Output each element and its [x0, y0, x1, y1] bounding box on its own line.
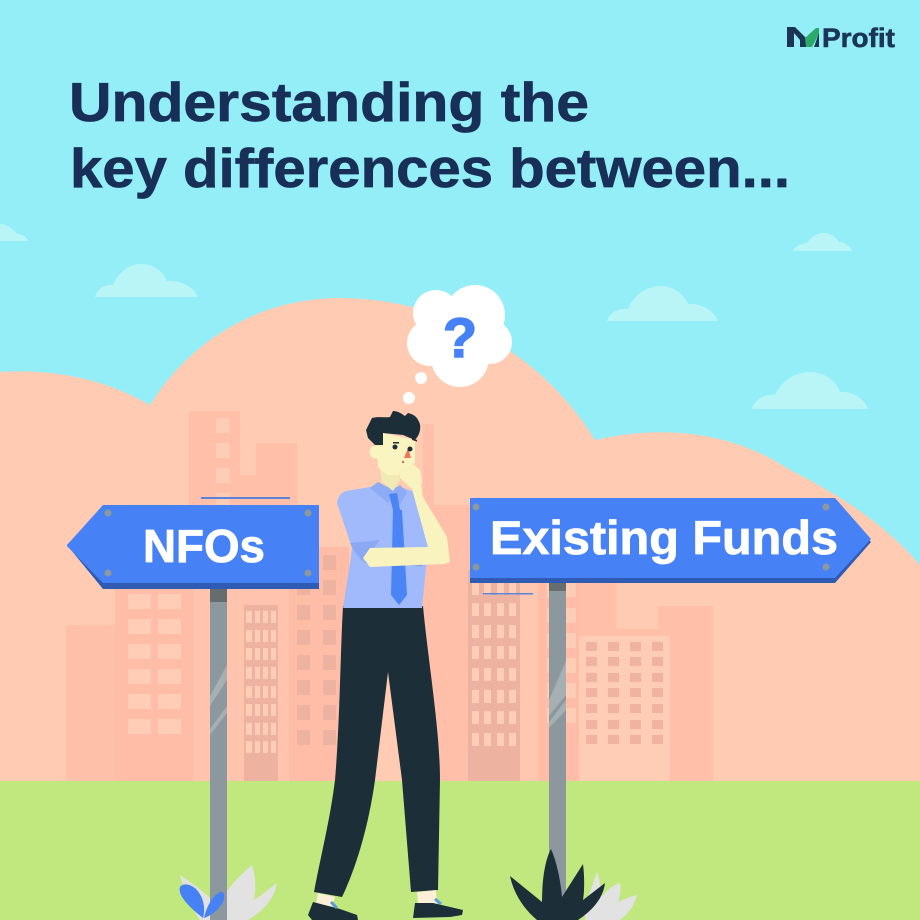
windowed building left: [115, 585, 193, 781]
question mark: ?: [443, 306, 477, 369]
sleeve shadow: [365, 558, 422, 566]
logo: MProfit: [787, 23, 895, 53]
ear: [370, 446, 382, 458]
left signpost: [210, 589, 227, 920]
face: [377, 433, 415, 475]
building windows behind right post: [547, 583, 576, 723]
clouds: [0, 224, 868, 409]
dark narrow building right: [468, 570, 520, 781]
plant: blue leaves: [180, 884, 224, 918]
tie: [389, 493, 407, 605]
plant: grey right: [585, 872, 637, 920]
low building left: [66, 625, 115, 781]
thought bubble: [403, 285, 512, 404]
label: Existing Funds: Existing Funds: [490, 511, 838, 564]
sign: NFOs: [67, 505, 319, 589]
collar: [370, 482, 407, 505]
dark narrow building left: [244, 605, 278, 781]
accent line left: [201, 497, 290, 499]
shirt: [337, 487, 428, 608]
building right of the man: [423, 424, 470, 781]
socks: [316, 890, 437, 908]
accent line right: [483, 593, 533, 594]
hand: [398, 463, 422, 489]
right shoe: [413, 903, 463, 918]
right signpost: [549, 583, 566, 920]
neck: [380, 468, 400, 491]
laces: [331, 899, 441, 908]
arm: [363, 480, 450, 567]
tall building behind left sign: [189, 411, 297, 520]
man thinking: [308, 411, 463, 920]
hair: [366, 411, 420, 445]
title: Understanding the: [69, 71, 589, 133]
building behind the man: [289, 547, 349, 781]
cuff: [350, 540, 380, 562]
plant: dark spiky: [510, 849, 605, 920]
label: NFOs: NFOs: [143, 520, 265, 572]
left shoe: [308, 902, 358, 920]
light windowed building right: [579, 636, 670, 781]
plant: grey left: [180, 865, 277, 920]
trousers: [314, 606, 440, 897]
nose: [404, 448, 411, 458]
grass ground: [0, 781, 920, 920]
title: key differences between...: [70, 137, 790, 199]
rear buildings right: [580, 582, 713, 781]
logo: MProfit: Profit: [822, 23, 895, 53]
eyes and brows: [392, 438, 417, 463]
sign: Existing Funds: [470, 498, 871, 583]
hills: [0, 298, 920, 781]
city buildings: [66, 411, 713, 781]
title: [69, 71, 790, 199]
